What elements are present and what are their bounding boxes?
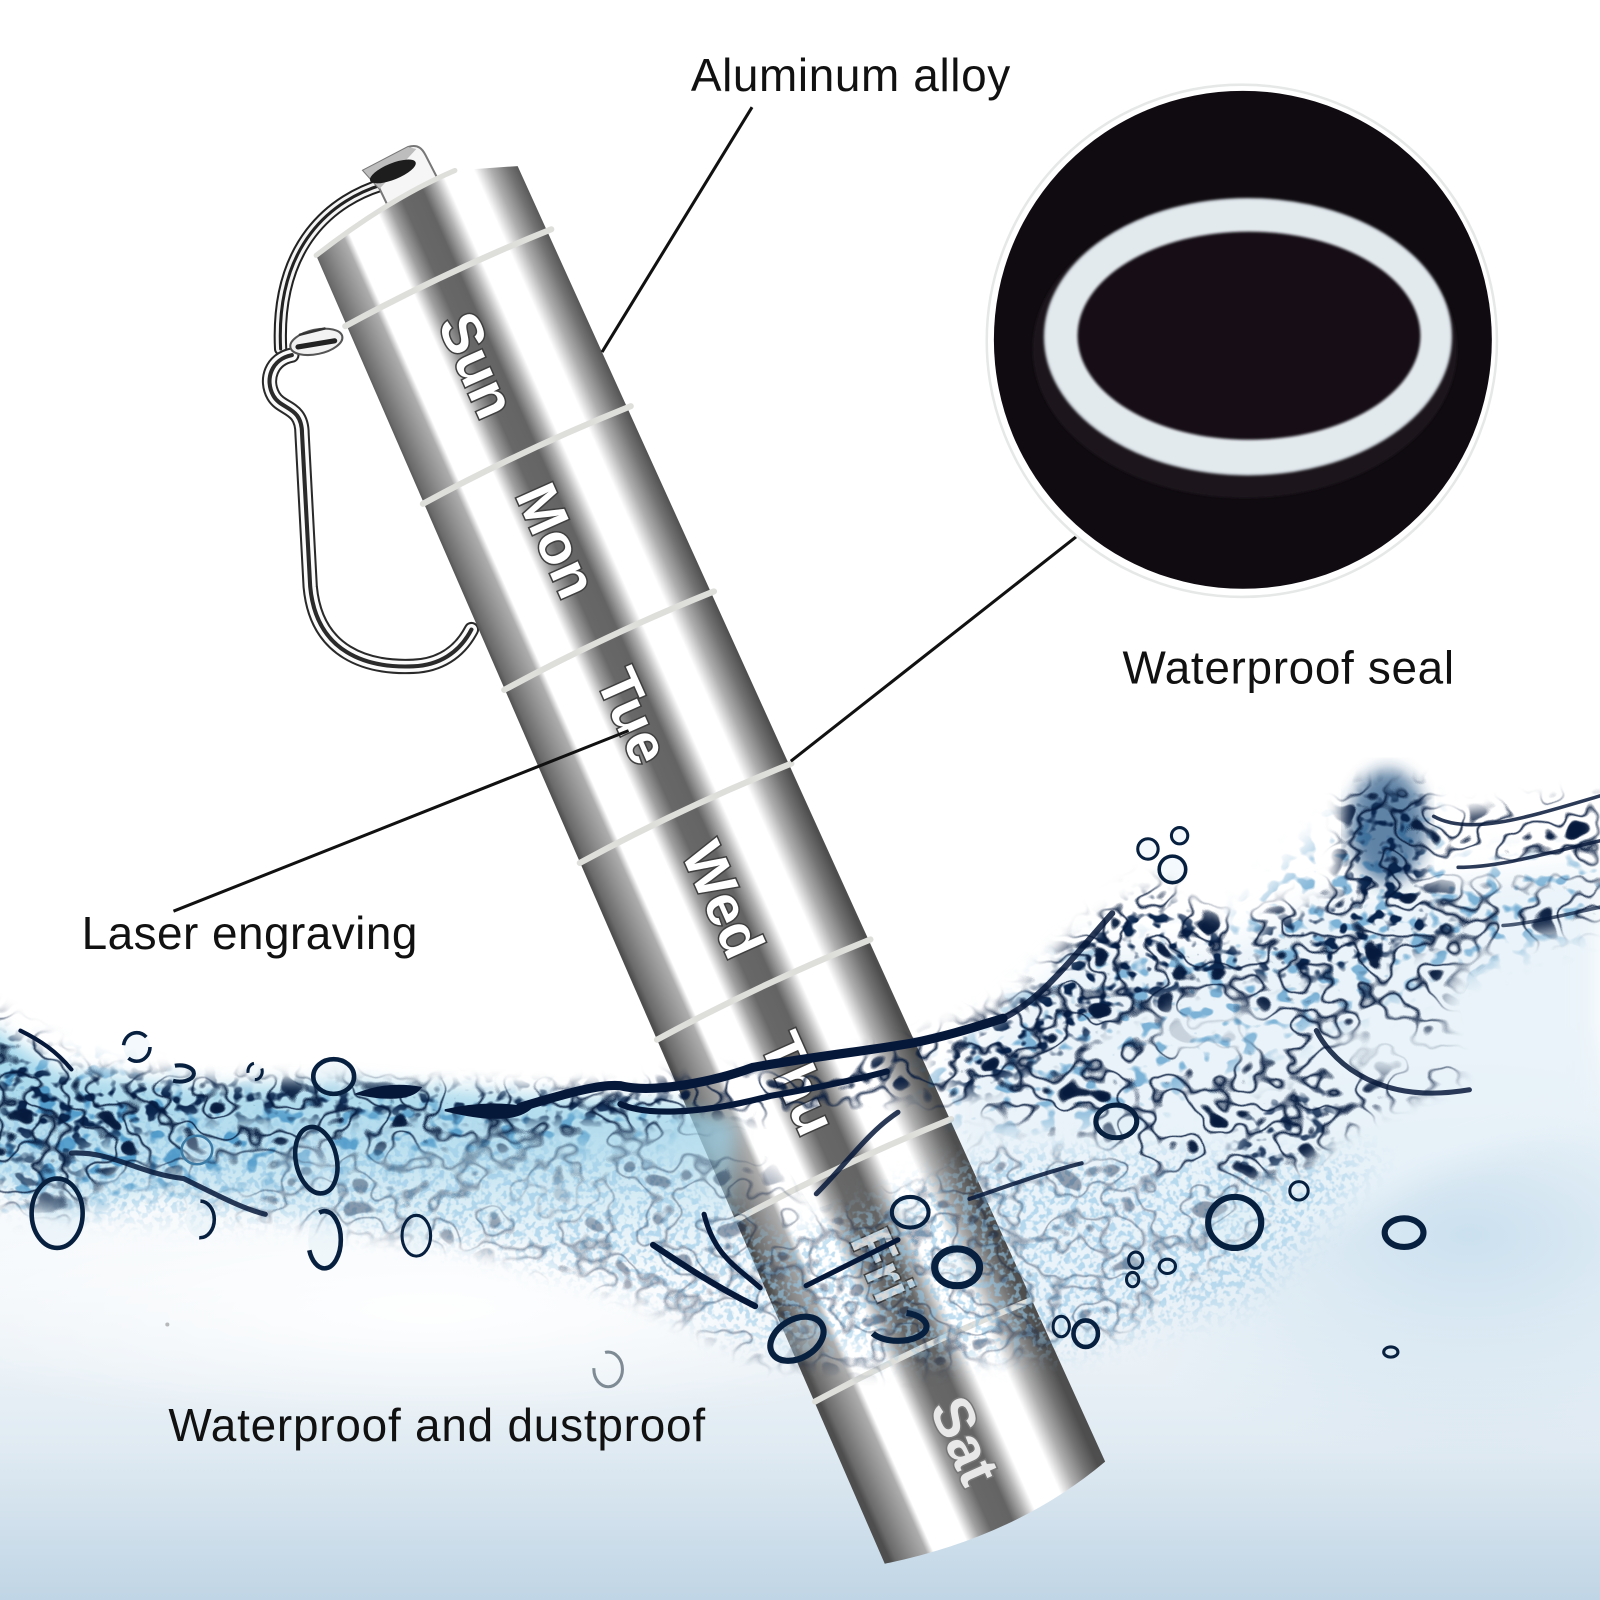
water splash: [0, 758, 1600, 1388]
leader line: waterproof seal: [791, 536, 1078, 761]
white o-ring: [1045, 199, 1451, 474]
bubbles: [32, 828, 1423, 1387]
crest blob: [1349, 769, 1427, 884]
Tue: Tue: [584, 659, 682, 774]
top loop of the tube: [363, 146, 443, 216]
dark waterline: [20, 796, 1600, 1306]
fine pale speckle: [0, 1103, 1375, 1372]
outer halo: [987, 85, 1497, 597]
Sun: Sun: [425, 303, 528, 428]
small clip: [288, 324, 345, 359]
seal ring lines: [300, 142, 1034, 1402]
pale water body behind the tube: [949, 867, 1600, 1347]
key ring and carabiner: [270, 184, 471, 667]
leader line: aluminum alloy: [602, 107, 752, 352]
dense dark belt texture: [0, 784, 1462, 1212]
blue speckle: [0, 792, 1600, 1219]
engraved day labels: [425, 303, 1012, 1494]
tube with seal rings: [298, 141, 1112, 1576]
Sat: Sat: [917, 1387, 1012, 1494]
background glow: [0, 1189, 980, 1434]
label: laser engraving: Laser engraving: [82, 907, 417, 959]
label: waterproof and dustproof: Waterproof and dustproof: [168, 1399, 705, 1451]
blue water band, left: [0, 1020, 735, 1286]
split ring: [280, 184, 386, 349]
Thu: Thu: [747, 1023, 848, 1145]
leader line: laser engraving: [173, 731, 629, 911]
right blue haze: [1061, 1010, 1600, 1459]
carabiner wire: [270, 355, 471, 667]
recess shadow: [1033, 200, 1457, 498]
Fri: Fri: [838, 1219, 926, 1312]
Wed: Wed: [669, 832, 776, 968]
seal detail circle: [987, 85, 1497, 597]
tube body: [298, 142, 1112, 1576]
dark contour lines: [0, 773, 1600, 1381]
inner disc: [1078, 232, 1420, 440]
black disc: [994, 91, 1492, 589]
Mon: Mon: [503, 474, 609, 607]
label: waterproof seal: Waterproof seal: [1122, 642, 1454, 694]
label: aluminum alloy: Aluminum alloy: [691, 49, 1010, 101]
